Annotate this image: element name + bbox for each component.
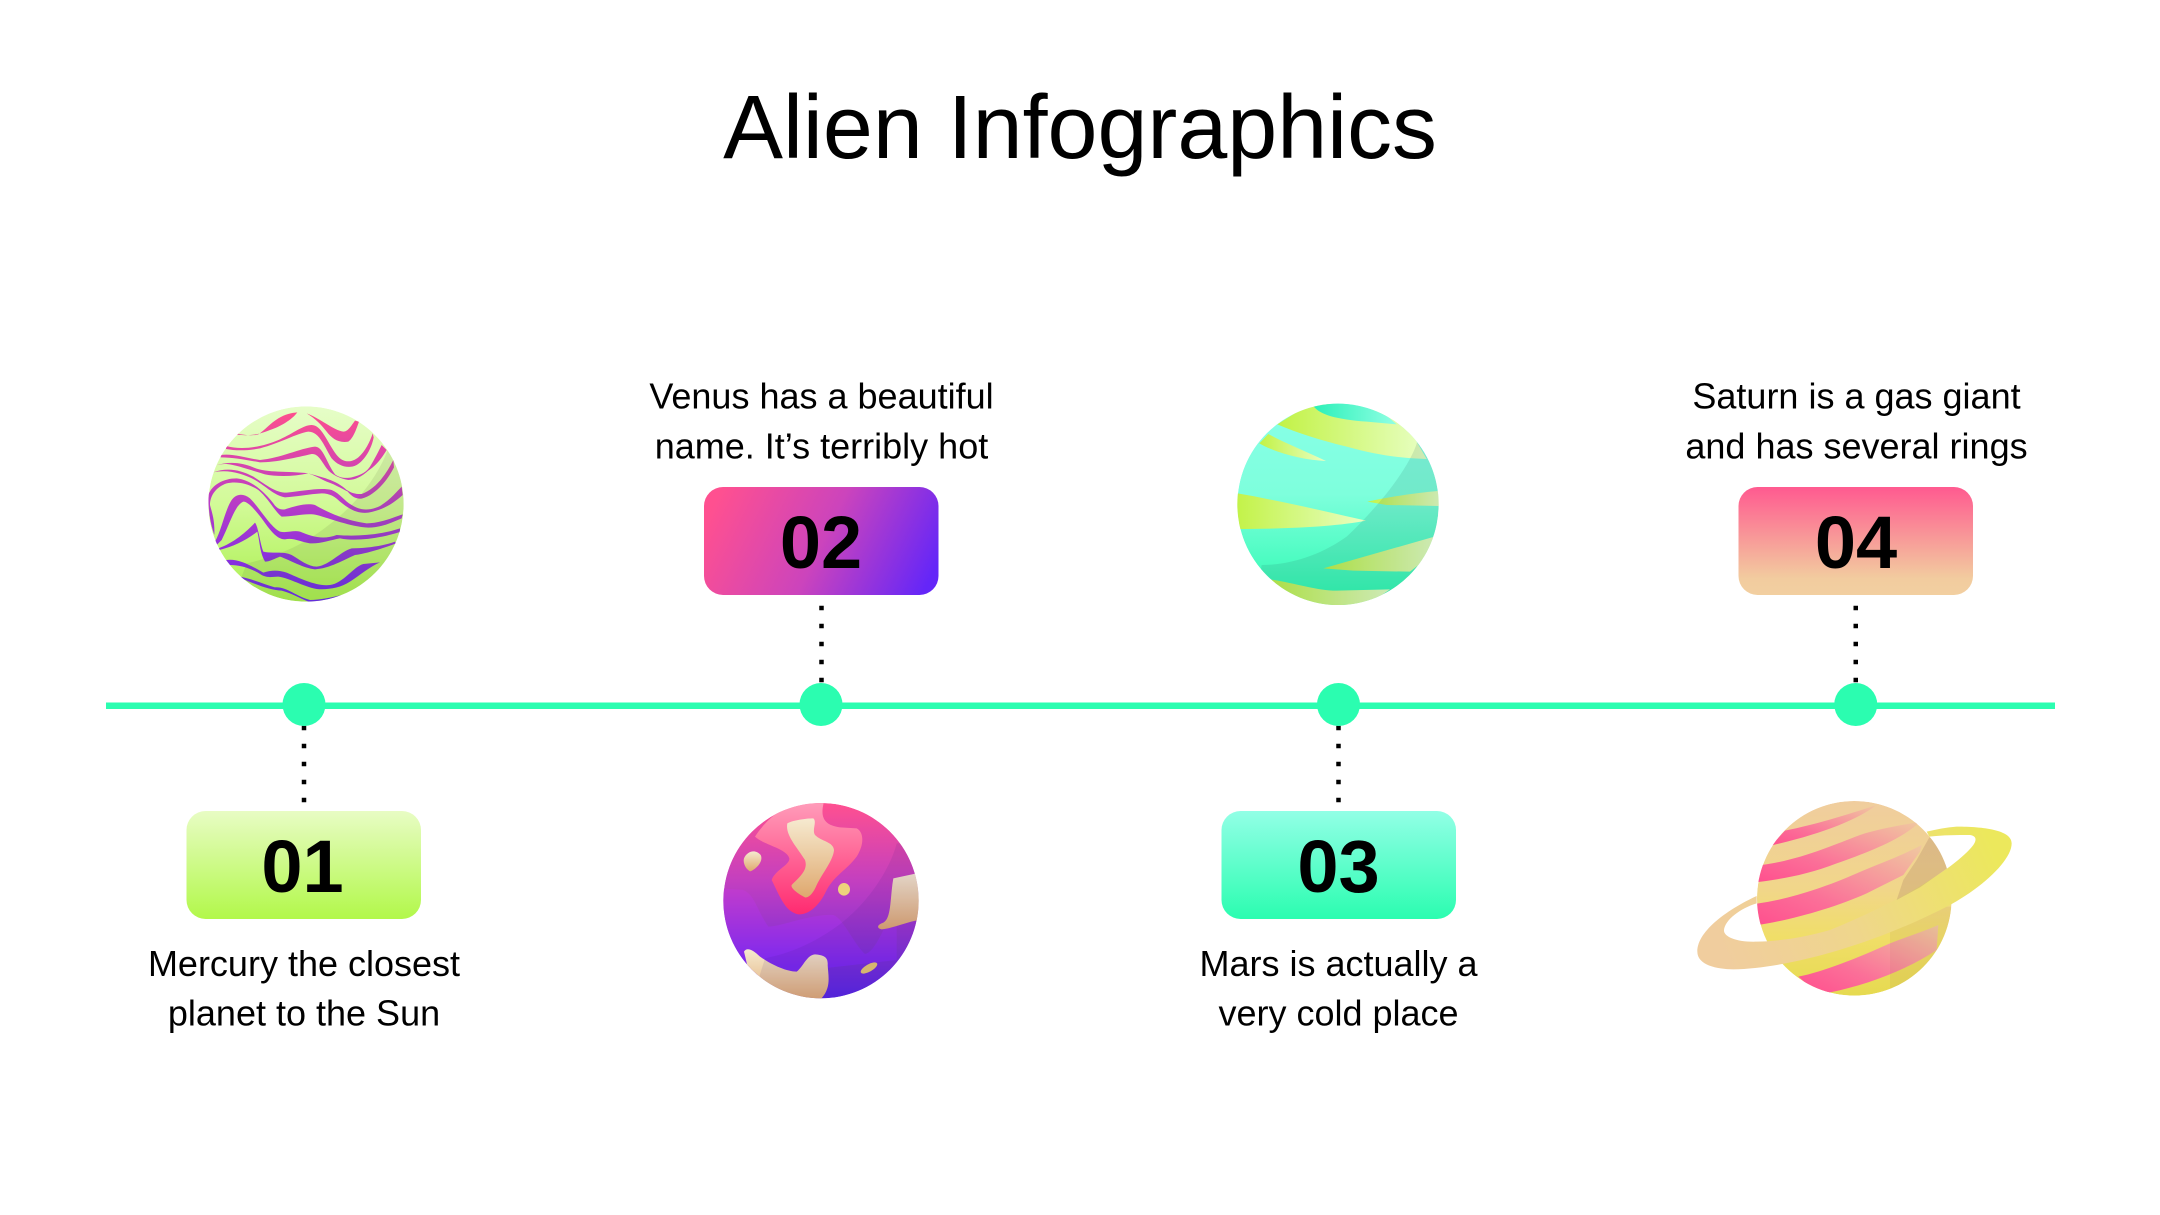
connector <box>1336 726 1341 802</box>
description: Mars is actually a <box>1199 943 1479 984</box>
number box 04: 04 <box>1815 501 1897 584</box>
icon: planet Venus <box>723 803 919 998</box>
connector <box>1854 606 1858 682</box>
timeline line <box>106 702 2055 709</box>
number box 01: 01 <box>261 825 344 908</box>
number box 04 <box>1738 487 1973 595</box>
description: Venus has a beautiful <box>649 376 994 416</box>
number box 03 <box>1222 811 1456 919</box>
icon: planet Mars <box>1237 404 1439 605</box>
number box 01 <box>186 811 421 919</box>
node <box>282 683 326 726</box>
node <box>1834 683 1877 726</box>
step 02: Venus <box>649 376 994 1013</box>
number box 03: 03 <box>1297 825 1380 908</box>
number box 02 <box>704 487 938 595</box>
description: planet to the Sun <box>168 992 440 1034</box>
connector <box>819 606 824 682</box>
description: very cold place <box>1218 992 1459 1034</box>
icon: planet Mercury <box>208 406 413 613</box>
description: and has several rings <box>1685 426 2028 466</box>
node <box>1317 683 1360 726</box>
step 03: Mars <box>1199 400 1479 1034</box>
node <box>800 683 842 726</box>
number box 02: 02 <box>780 501 862 584</box>
icon: planet Saturn <box>1697 801 2012 1007</box>
description: name. It’s terribly hot <box>655 426 988 466</box>
step 01: Mercury <box>148 406 460 1034</box>
description: Mercury the closest <box>148 943 460 984</box>
description: Saturn is a gas giant <box>1692 376 2021 416</box>
step 04: Saturn <box>1685 376 2028 1007</box>
title: Alien Infographics <box>723 78 1437 178</box>
connector <box>302 726 306 802</box>
